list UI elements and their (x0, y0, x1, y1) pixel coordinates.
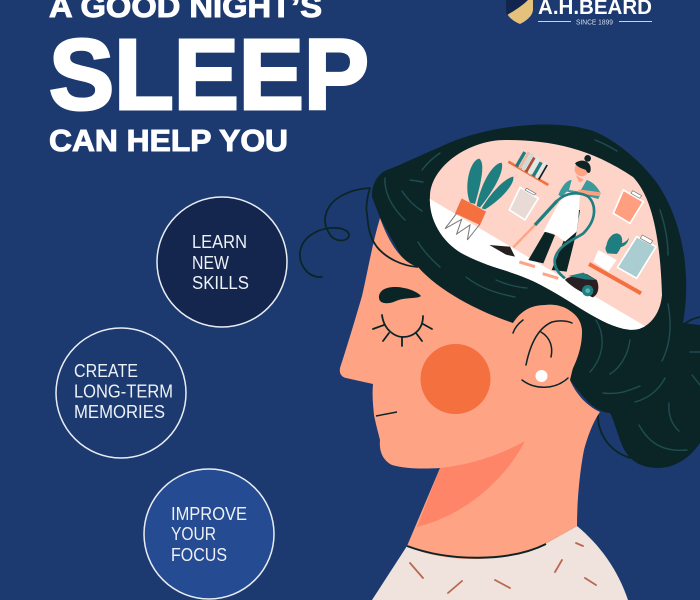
circle: improve your focus: IMPROVE (171, 504, 247, 524)
shirt dashes (410, 543, 596, 593)
cactus and shelf (589, 233, 641, 293)
closed eye (373, 315, 432, 346)
hair strands (385, 140, 700, 450)
ear (513, 307, 582, 388)
neck shadow (417, 441, 525, 527)
frame (509, 187, 538, 220)
clipboard blue (617, 235, 656, 278)
brain scene (430, 140, 662, 330)
logo: A.H.Beard: SINCE 1899 (576, 20, 613, 26)
circle: create long-term memories (56, 328, 186, 458)
earring (536, 370, 548, 382)
hair back and bun (372, 124, 700, 468)
circle: learn new skills: NEW (192, 253, 229, 273)
wall shelf with books (508, 149, 549, 185)
face and neck (340, 218, 600, 559)
title: SLEEP (49, 19, 369, 131)
collar line (407, 544, 546, 558)
mouth (376, 412, 397, 416)
woman illustration (300, 124, 700, 600)
scene objects (445, 149, 656, 297)
woman vacuuming (489, 155, 601, 297)
icon: shield (506, 0, 533, 24)
circle: create long-term memories: CREATE (74, 361, 138, 381)
cheek (420, 344, 490, 414)
title: CAN HELP YOU (49, 123, 288, 158)
title (49, 0, 369, 158)
logo: A.H.Beard (506, 0, 652, 26)
curl of hair (300, 188, 700, 458)
clipboard orange (613, 190, 643, 223)
hair line over forehead (366, 188, 418, 267)
shirt (372, 526, 628, 600)
circle: improve your focus: YOUR (171, 524, 216, 544)
circle: learn new skills: SKILLS (192, 273, 249, 293)
eyebrow (379, 287, 421, 303)
circle: learn new skills (157, 197, 287, 327)
room wall and floor (430, 140, 662, 330)
circle: improve your focus (144, 469, 274, 599)
circle: learn new skills: LEARN (192, 232, 247, 252)
circle: create long-term memories: LONG-TERM (74, 382, 173, 402)
potted plant (445, 159, 513, 240)
circle: improve your focus: FOCUS (171, 545, 227, 565)
circle: create long-term memories: MEMORIES (74, 402, 165, 422)
